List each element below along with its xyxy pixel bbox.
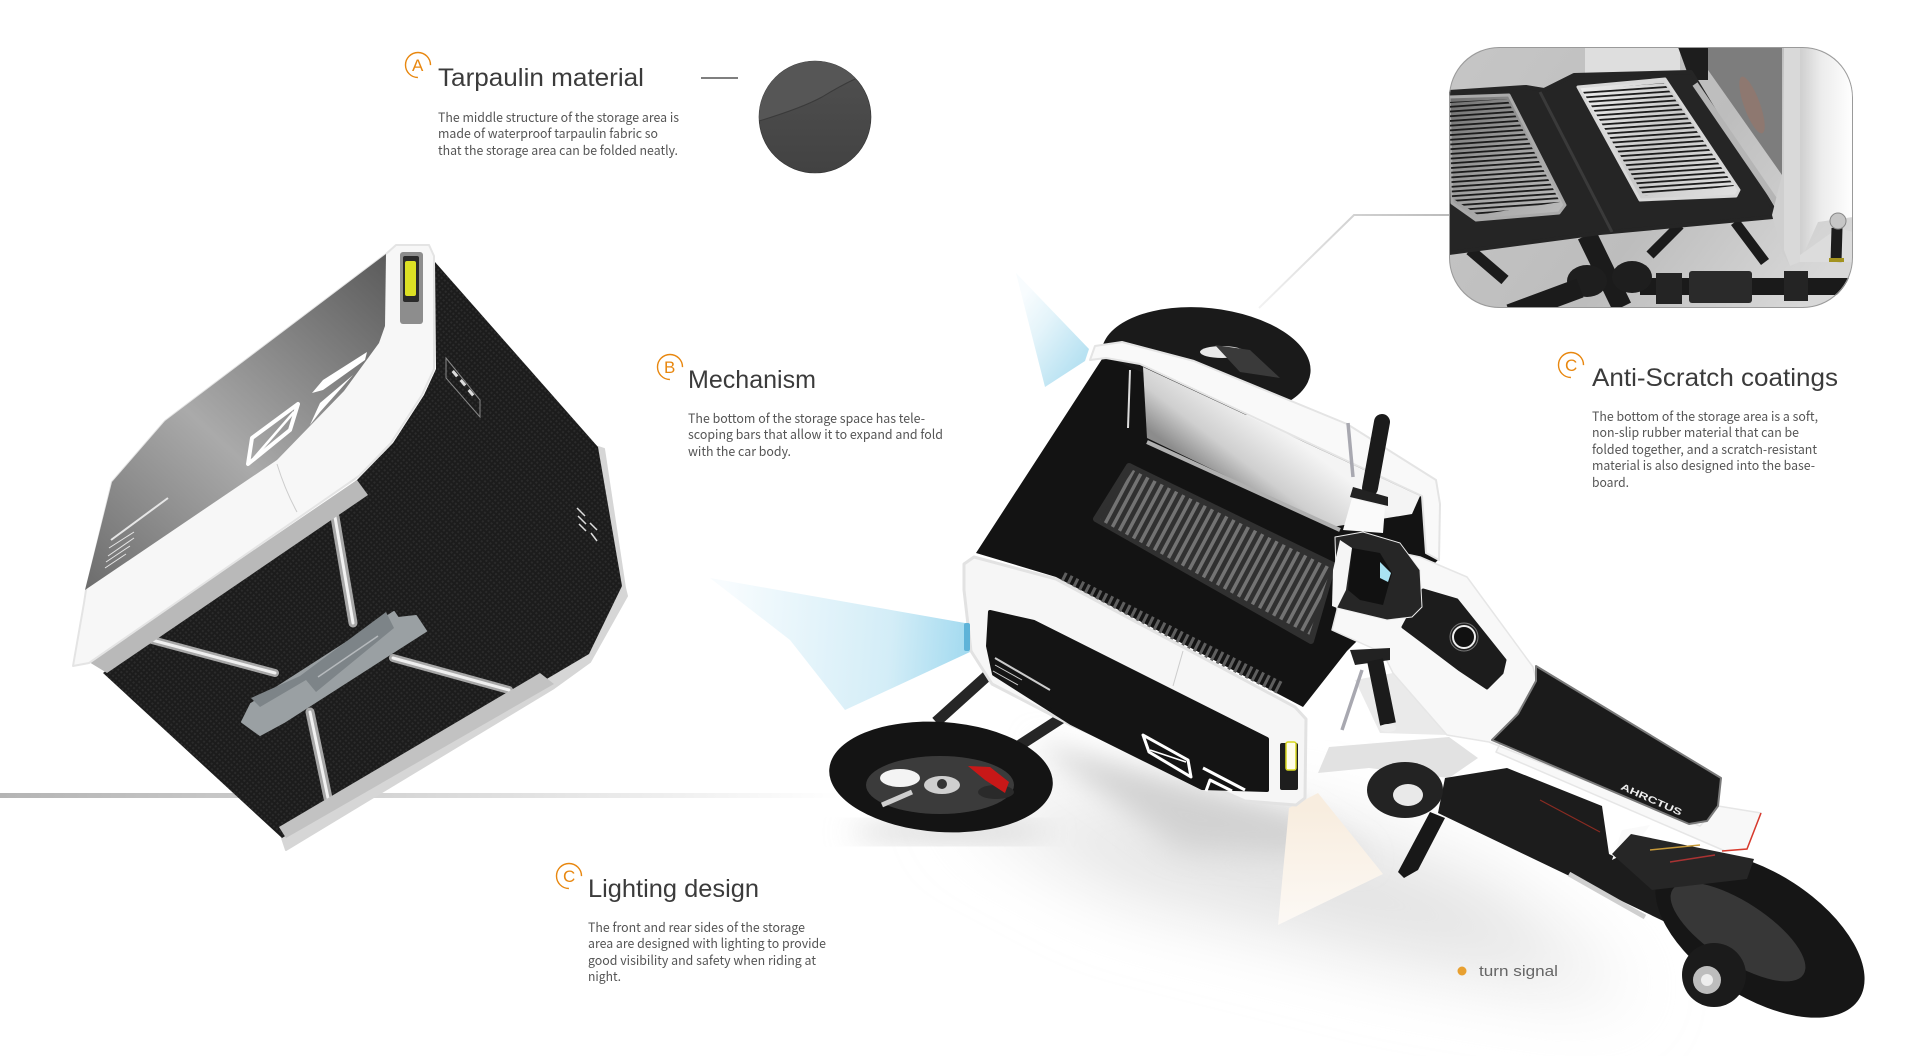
inner rail [1147,442,1340,530]
right metal plate [1578,79,1739,200]
handlebar neck [1343,498,1385,533]
heading: Anti-Scratch coatings: Anti-Scratch coatings [1592,364,1838,392]
body text: lighting: night. [588,966,621,985]
connector dash [701,77,738,79]
seam [277,464,297,512]
inner white wall [1143,367,1420,527]
door panel [1772,48,1853,241]
material swatch [758,60,872,174]
side panel seam [1173,651,1183,686]
badge A [406,52,430,78]
body text: coatings: board. [1592,472,1629,491]
mat centre fold [1540,92,1612,232]
white band [73,245,434,666]
headlight shield [1335,532,1422,620]
heading: Tarpaulin material: Tarpaulin material [438,64,644,92]
detail photo: anti-scratch floor [1449,47,1853,314]
dash panel [1403,590,1505,688]
silver rail [1695,84,1778,205]
lamp housing [403,256,419,302]
silver frame lower right [1800,247,1812,262]
turn signal beam [1278,793,1383,925]
side logo 02 [1143,735,1245,791]
badge B: B [664,358,675,377]
upper white rim [1090,342,1440,560]
upper light beam [1016,273,1089,387]
glass wall [1708,47,1782,175]
rear light beam [710,578,970,710]
shell contact shadow [1030,740,1370,860]
ribbed rubber mat [1096,466,1333,641]
badge C lighting: C [563,867,575,886]
badge A: A [412,56,424,75]
tail red line [1722,813,1761,851]
fabric marks [577,508,597,541]
connector tube [1506,261,1849,307]
rear wheel knob [1682,943,1746,1007]
floor line [0,793,840,798]
telescoping rods [152,517,509,798]
lamp slot [400,252,423,324]
section: mechanism [658,354,943,460]
seat: AHRCTUS [1619,782,1684,819]
badge B [658,354,682,380]
rear wheel [1627,819,1893,1051]
section: lighting design [556,864,826,985]
seat [1492,666,1721,824]
yellow lamp [405,261,416,296]
photo frame [1450,48,1852,308]
interior black tub [976,356,1438,707]
heading: Mechanism: Mechanism [688,366,816,394]
black post [1678,47,1708,80]
heading: Lighting design: Lighting design [588,875,759,903]
silver strip [1569,874,1645,917]
body text: tarpaulin [438,107,679,159]
section: anti-scratch coatings [1558,352,1838,491]
swing arm [1438,768,1732,940]
body text: coatings [1592,406,1818,491]
folded storage box [73,245,627,850]
body text: coatings: material is also designed into the base- [1592,455,1815,474]
white scooter body [1332,540,1761,851]
badge C lighting [556,864,582,888]
wall trim line [1128,370,1130,428]
back wall strip [1585,48,1680,73]
box outer rim [279,447,627,850]
electric trike [825,297,1893,1051]
section: tarpaulin material [406,52,872,173]
body text: coatings: The bottom of the storage area is a soft, [1592,406,1818,425]
body text: mechanism: with the car body. [688,441,791,460]
callout leader line [1259,215,1449,308]
side lamp [1280,742,1298,790]
black side panel [988,612,1267,790]
fender [1612,834,1754,890]
body text: lighting: The front and rear sides of the storage [588,917,805,936]
legend: turn signal: turn signal [1479,963,1558,980]
suspension arms [936,676,1071,745]
body text: coatings: non-slip rubber material that can be [1592,422,1799,441]
red trim line [1540,800,1600,832]
bolt [1829,213,1846,262]
upper storage wheel [1096,297,1316,427]
wheel shadow [850,823,1050,841]
black folding mat [1449,72,1773,253]
panel micro text [105,498,168,568]
panel small text [993,658,1050,690]
fabric side [103,262,622,838]
upper handlebar [1348,422,1388,506]
white gap in frame [1612,825,1650,860]
fabric label [446,358,480,417]
body text: mechanism: scoping bars that allow it to expand and fold [688,424,943,443]
red reflection [1740,76,1764,134]
lower ribbed strip [1062,578,1280,688]
badge C coatings: C [1565,356,1577,375]
door silver edge [1784,47,1800,266]
trike broad ground shadow [950,800,1640,1000]
lower white column [1355,673,1447,735]
badge C coatings [1558,352,1584,378]
body text: mechanism: The bottom of the storage space has tele- [688,408,925,427]
logo 02 [248,352,367,464]
kickstand [1398,812,1445,878]
body text: lighting: area are designed with lighting to provide [588,933,826,952]
lower metal bar [279,673,554,838]
front wheel [825,714,1057,840]
body text: tarpaulin: that the storage area can be folded neatly. [438,140,678,159]
drive hub [1367,762,1443,818]
fender wires [1650,845,1715,862]
body text: mechanism [688,408,943,460]
understructure struts [1470,222,1765,307]
front white shell [964,557,1306,805]
body text: tarpaulin: made of waterproof tarpaulin fabric so [438,123,658,142]
white neck left [1332,540,1352,608]
body text: lighting [588,917,826,985]
body text: tarpaulin: The middle structure of the storage area is [438,107,679,126]
central bracket [242,612,426,735]
upper metal bar [89,480,368,673]
left metal plate [1449,95,1565,220]
chassis white cross piece [1318,737,1478,778]
top panel [85,254,386,590]
body text: lighting: good visibility and safety when riding at [588,950,816,969]
legend: turn signal [1458,963,1558,980]
blue lamp [964,623,970,651]
lower handlebar [1342,648,1396,732]
body text: coatings: folded together, and a scratch-resistant [1592,439,1817,458]
